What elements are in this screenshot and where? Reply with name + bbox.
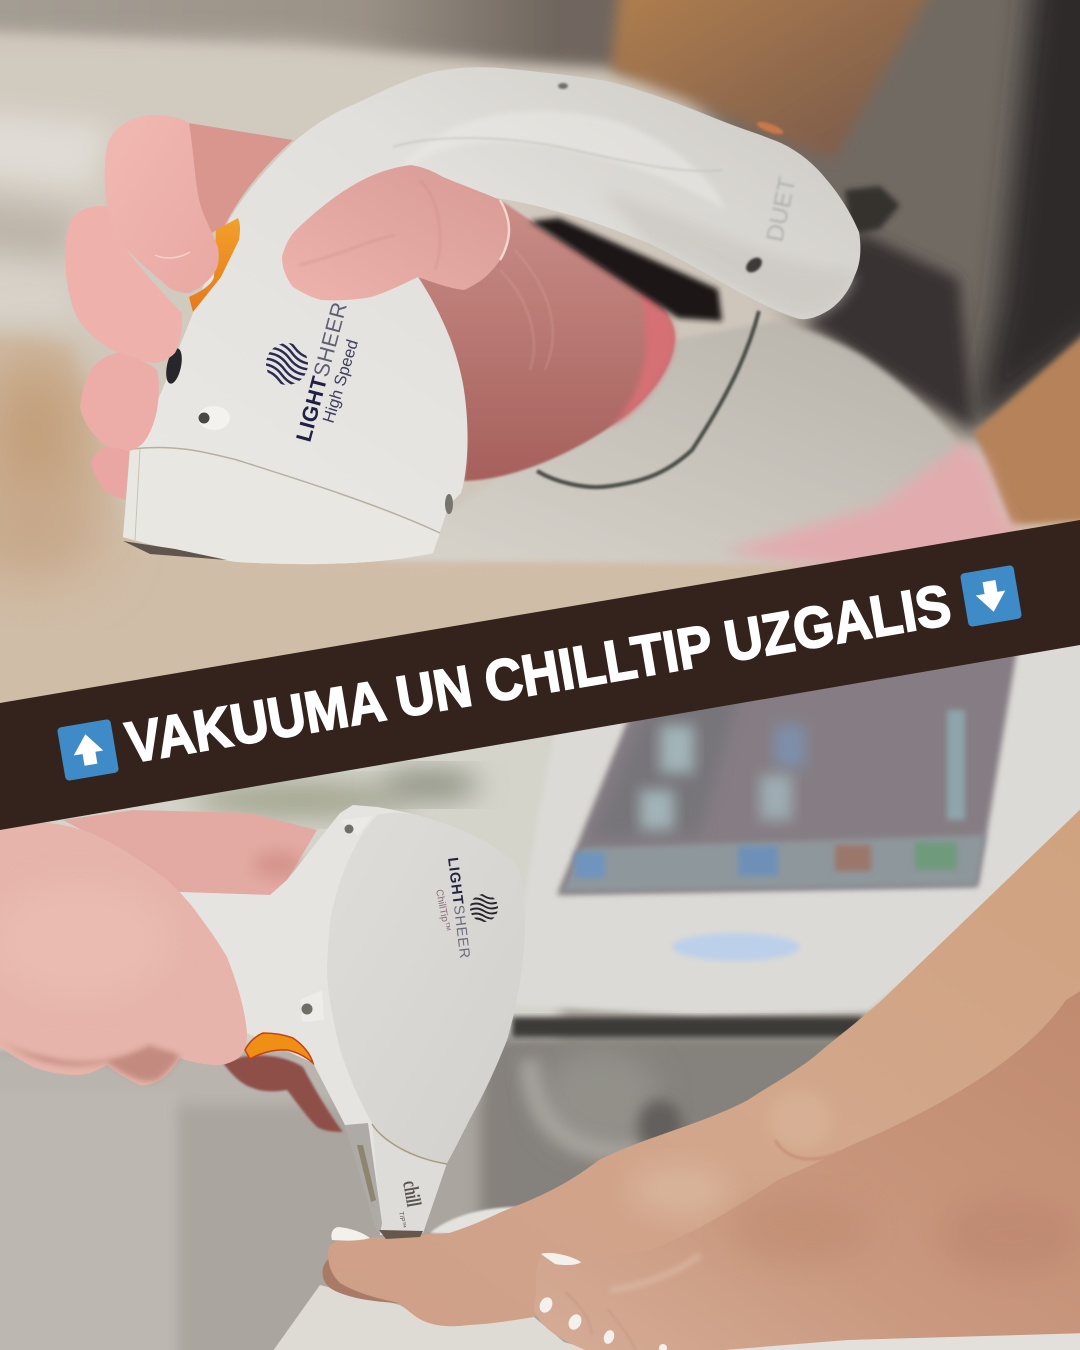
handpiece: ChillTip device body: ChillTip™ bbox=[433, 888, 452, 933]
tip bbox=[372, 1123, 447, 1235]
banner: diagonal dark strip bbox=[0, 520, 1080, 830]
small orange tab on handle bbox=[756, 120, 784, 136]
screws bbox=[340, 816, 372, 836]
text: LIGHTSHEER ChillTip: LIGHT SHEER bbox=[444, 857, 472, 960]
device tip on skin bbox=[123, 541, 227, 560]
photo: ChillTip handpiece on foot bbox=[0, 620, 1080, 1350]
thumb bbox=[282, 165, 509, 300]
hand below trigger bbox=[223, 1055, 343, 1132]
black button bbox=[166, 348, 182, 384]
logo: LightSheer swirl bbox=[266, 343, 308, 385]
icon: cable bbox=[537, 311, 759, 487]
handpiece: vacuum device body bbox=[123, 67, 860, 564]
blurred background: room, bedding and arm bbox=[0, 0, 1080, 740]
hand behind: palm in pink glove bbox=[418, 200, 675, 481]
hand: pink glove fingers bbox=[65, 115, 509, 500]
heading: banner title: VAKUUMA UN CHILLTIP UZGALIS bbox=[121, 572, 955, 776]
white cushion and sheet bbox=[270, 1207, 1080, 1350]
handpiece: ChillTip device body bbox=[180, 805, 525, 1239]
photo: vacuum handpiece on skin bbox=[0, 0, 1080, 740]
text: chill tip label: chill bbox=[398, 1179, 426, 1209]
index finger bbox=[105, 115, 219, 293]
device face bbox=[327, 813, 525, 1163]
gel highlights bbox=[610, 1255, 700, 1290]
orange trigger bbox=[245, 1033, 313, 1063]
handpiece: ChillTip device body: TIP™ bbox=[397, 1211, 407, 1229]
foot and leg: front foot bbox=[331, 985, 1080, 1350]
little finger bbox=[91, 447, 129, 500]
orange button bbox=[189, 218, 240, 312]
blurred model text: DUET bbox=[761, 174, 802, 244]
hand: pink glove front bbox=[0, 823, 247, 1085]
foot and leg: back foot bbox=[328, 800, 1080, 1326]
dark strap under handle bbox=[530, 218, 722, 321]
blurred background: room and shelf bbox=[0, 700, 1080, 1350]
ring finger bbox=[80, 353, 159, 452]
logo: LightSheer swirl bbox=[468, 894, 500, 924]
toe behind big toe bbox=[322, 1258, 398, 1303]
icon: up arrow bbox=[57, 719, 119, 781]
toenails bbox=[331, 1227, 667, 1350]
handpiece: vacuum device body: High Speed bbox=[320, 337, 362, 425]
text: LIGHTSHEER High Speed: LIGHTSHEER bbox=[292, 299, 352, 444]
middle finger bbox=[65, 206, 182, 363]
screen bbox=[557, 650, 1017, 895]
icon: down arrow bbox=[960, 565, 1022, 627]
screw bbox=[198, 406, 230, 430]
back of index finger bbox=[189, 123, 293, 233]
monitor: laser console bbox=[505, 630, 1080, 1037]
small dark object behind handpiece bbox=[845, 186, 900, 235]
hand: pink glove back bbox=[63, 810, 317, 895]
blue glowing logo bbox=[672, 933, 800, 961]
